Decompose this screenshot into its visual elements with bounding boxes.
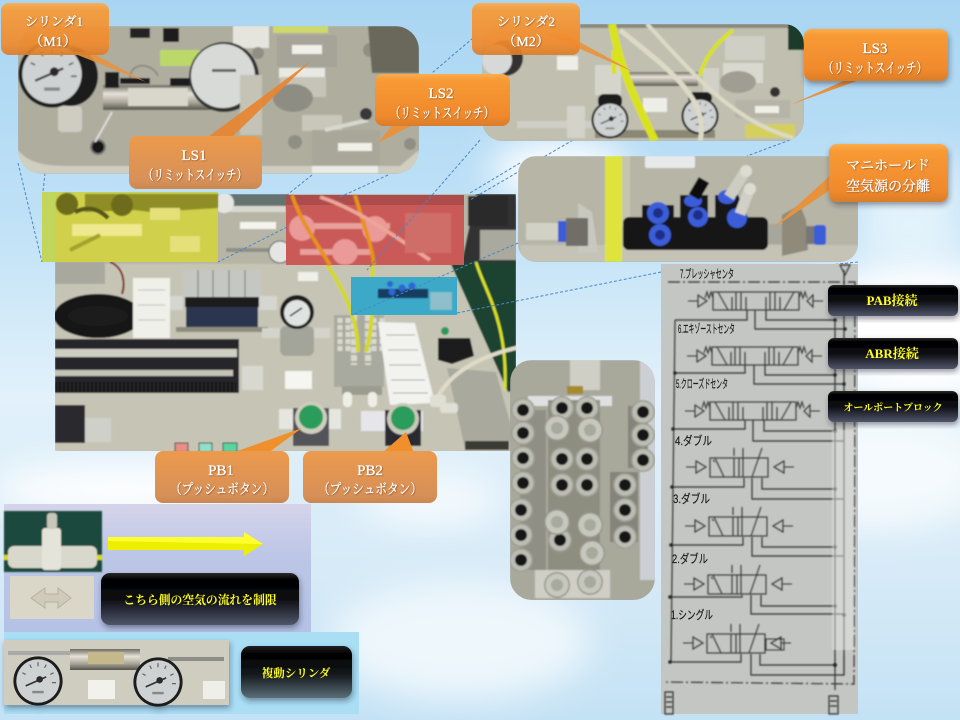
callout: シリンダ2 xyxy=(472,3,634,72)
panel: main control board photo xyxy=(54,193,520,452)
schematic labels: 5.クローズドセンタ xyxy=(676,376,728,391)
highlight: cylinder 1 area (yellow) xyxy=(42,192,218,262)
callout: シリンダ1: シリンダ1 xyxy=(25,14,83,29)
callout: LS1 xyxy=(129,60,312,189)
schematic labels: 3.ダブル xyxy=(673,491,710,506)
photo: double-acting cylinder xyxy=(4,640,229,707)
arrow: flow direction xyxy=(108,532,263,556)
callout: シリンダ1 xyxy=(1,3,146,82)
schematic labels: 4.ダブル xyxy=(675,433,712,448)
callout: LS3: （リミットスイッチ） xyxy=(823,61,927,77)
panel: manifold close-up xyxy=(518,156,860,262)
button: ABR接続: ABR接続 xyxy=(865,346,919,361)
callout: LS3: LS3 xyxy=(862,41,888,57)
cylinder body xyxy=(103,85,213,110)
schematic labels xyxy=(671,267,735,622)
button: こちら側の空気の流れを制限 xyxy=(101,573,299,625)
wiring diagram paper xyxy=(133,278,170,338)
right bulkhead fitting xyxy=(768,224,782,244)
push buttons in photo xyxy=(279,409,341,429)
panel: pneumatic schematic: 6.エキゾーストセンタ xyxy=(678,322,735,336)
button: 複動シリンダ xyxy=(241,646,352,698)
callout: LS3 xyxy=(790,29,948,105)
button: PAB接続: PAB接続 xyxy=(866,293,918,308)
button: 複動シリンダ: 複動シリンダ xyxy=(262,666,331,680)
yellow tubes xyxy=(325,262,358,352)
photo: embossed flow arrow plate xyxy=(10,576,94,619)
dark green side strip xyxy=(450,262,516,392)
panel: pneumatic schematic xyxy=(661,264,858,714)
push-in tubes xyxy=(694,180,704,197)
callout: マニホールド 空気源の分離: マニホールド xyxy=(846,159,930,174)
panel: valve block close-up xyxy=(509,360,655,600)
callout: LS1: （リミットスイッチ） xyxy=(143,168,247,184)
gauge M1 xyxy=(64,47,99,107)
gauge centre xyxy=(189,42,259,112)
supply lines and frame xyxy=(664,265,855,714)
tubes xyxy=(612,24,655,141)
button: ABR接続 xyxy=(828,338,958,369)
panel: double-acting cylinder explanation xyxy=(4,632,359,714)
callout: LS1: LS1 xyxy=(181,148,207,164)
limit switch LS2 xyxy=(302,115,342,131)
panel: cylinder 1 close-up xyxy=(18,26,419,174)
button: オールポートブロック xyxy=(828,391,958,422)
board upper band xyxy=(104,194,476,264)
callout: PB1: （プッシュボタン） xyxy=(170,482,274,498)
schematic labels: 1.シングル xyxy=(671,608,713,622)
callout: マニホールド 空気源の分離 xyxy=(773,144,948,228)
callout: マニホールド 空気源の分離: 空気源の分離 xyxy=(846,178,930,195)
callout: PB2 xyxy=(303,432,437,503)
limit switch LS3 xyxy=(735,100,790,118)
schematic labels: 7.プレッシャセンタ xyxy=(680,267,734,281)
callout: LS2 xyxy=(375,74,510,143)
callout: LS2: （リミットスイッチ） xyxy=(390,106,494,122)
photo: speed controller fitting xyxy=(4,511,102,572)
callout: シリンダ1: （M1） xyxy=(29,34,77,50)
center valve manifold xyxy=(334,315,384,387)
callout: LS2: LS2 xyxy=(428,86,454,102)
solenoid valve xyxy=(447,368,515,449)
indicator lamps xyxy=(175,443,188,452)
black manifold body xyxy=(623,217,768,250)
dashed leader lines xyxy=(18,38,858,315)
valve symbols xyxy=(688,292,823,310)
regulator xyxy=(280,326,314,356)
callout: PB2: PB2 xyxy=(357,463,383,479)
callout: PB2: （プッシュボタン） xyxy=(318,482,422,498)
schematic labels: 2.ダブル xyxy=(672,551,708,566)
button: オールポートブロック: オールポートブロック xyxy=(843,401,943,414)
glare on schematic sheet xyxy=(832,430,854,650)
panel: cylinder 2 close-up xyxy=(482,24,804,141)
terminal blocks xyxy=(55,339,239,393)
button: こちら側の空気の流れを制限: こちら側の空気の流れを制限 xyxy=(123,593,277,607)
panel: speed controller explanation xyxy=(4,504,311,632)
highlight: manifold area (blue) xyxy=(351,277,457,315)
process paper xyxy=(378,322,435,405)
button: PAB接続 xyxy=(828,285,958,316)
callout: PB1: PB1 xyxy=(208,463,234,479)
highlight: cylinder 2 area (red) xyxy=(286,195,464,265)
rotary switch xyxy=(438,338,474,364)
callout: シリンダ2: （M2） xyxy=(502,34,550,50)
black cable coil xyxy=(54,294,142,338)
relay row xyxy=(183,270,261,298)
limit switch LS1 xyxy=(277,35,337,67)
callout: シリンダ2: シリンダ2 xyxy=(497,14,555,29)
callout: PB1 xyxy=(155,428,302,503)
